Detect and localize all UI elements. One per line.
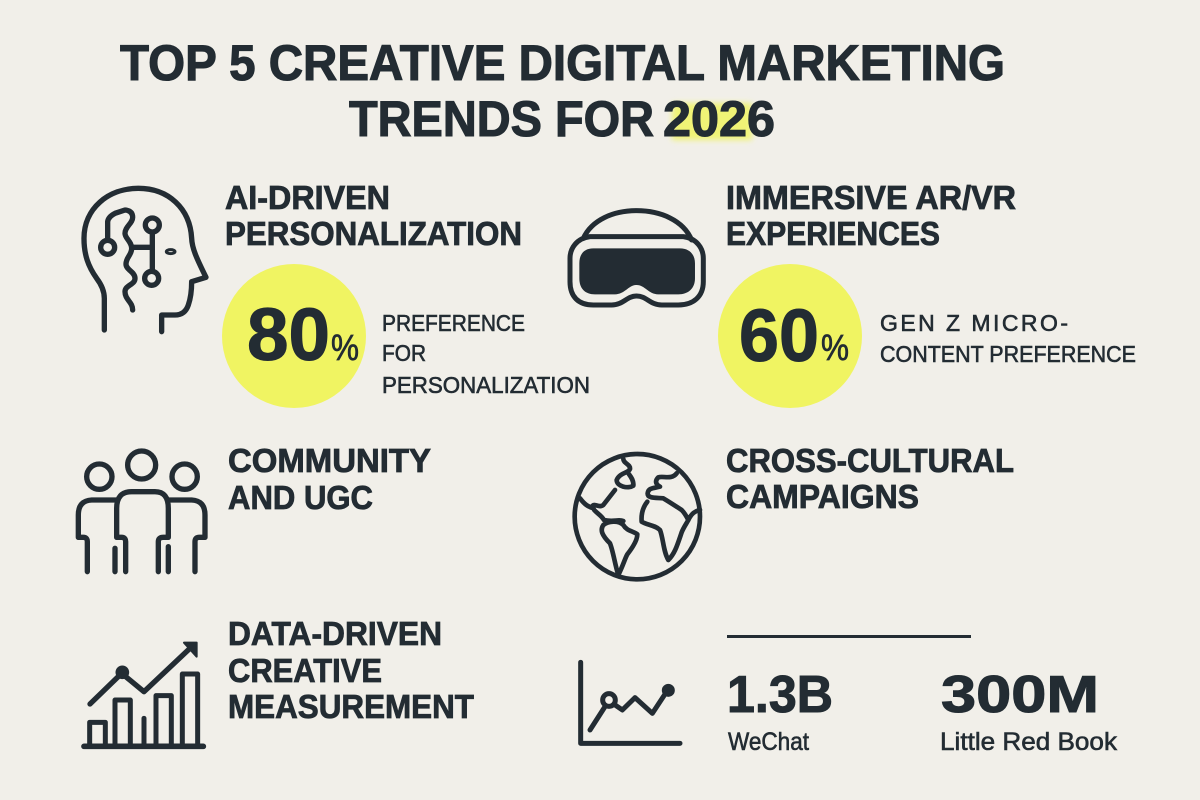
icon: three people bbox=[78, 451, 205, 572]
icon: VR headset bbox=[570, 211, 703, 305]
heading: EXPERIENCES bbox=[726, 215, 940, 252]
heading: COMMUNITY bbox=[228, 442, 431, 479]
stat circle: 80%: % bbox=[331, 327, 359, 368]
heading: PERSONALIZATION bbox=[225, 215, 522, 252]
stat label: GEN Z MICRO- bbox=[880, 310, 1068, 336]
stat label: PERSONALIZATION bbox=[382, 372, 590, 398]
heading: MEASUREMENT bbox=[228, 688, 474, 725]
stat circle: 60%: 60 bbox=[739, 294, 819, 377]
heading bbox=[726, 179, 1016, 252]
icon: head with circuit bbox=[84, 188, 206, 332]
stat: Little Red Book: 300M bbox=[941, 666, 1099, 724]
heading: CREATIVE bbox=[228, 652, 382, 689]
stat label bbox=[880, 310, 1136, 367]
panel: data-driven creative measurement bbox=[84, 615, 474, 746]
stat label bbox=[382, 310, 590, 398]
stat: WeChat bbox=[727, 666, 833, 756]
heading: CAMPAIGNS bbox=[726, 478, 919, 515]
panel: immersive AR/VR experiences bbox=[570, 179, 1136, 408]
panel: AI-driven personalization bbox=[84, 179, 590, 408]
stat label: CONTENT PREFERENCE bbox=[880, 341, 1136, 367]
title bbox=[120, 35, 1005, 147]
heading bbox=[726, 442, 1014, 515]
title: 2026 bbox=[663, 91, 775, 147]
stat: WeChat: WeChat bbox=[728, 728, 809, 756]
stat label: PREFERENCE bbox=[382, 310, 525, 336]
heading: DATA-DRIVEN bbox=[228, 615, 442, 652]
panel: platform statistics bbox=[581, 635, 1118, 756]
icon: bar chart with rising arrow bbox=[84, 643, 203, 746]
stat circle: 60% bbox=[718, 264, 862, 408]
icon: globe bbox=[575, 454, 700, 579]
title: TOP 5 CREATIVE DIGITAL MARKETING bbox=[120, 35, 1005, 91]
heading bbox=[228, 615, 474, 725]
stat circle: 60%: % bbox=[821, 327, 849, 368]
stat circle: 80% bbox=[222, 264, 366, 408]
heading: IMMERSIVE AR/VR bbox=[726, 179, 1016, 216]
heading: CROSS-CULTURAL bbox=[726, 442, 1014, 479]
panel: cross-cultural campaigns bbox=[575, 442, 1014, 579]
stat: Little Red Book bbox=[940, 666, 1118, 756]
title: TRENDS FOR bbox=[349, 91, 654, 147]
heading: AI-DRIVEN bbox=[225, 179, 390, 216]
icon: line chart bbox=[581, 662, 680, 743]
heading bbox=[225, 179, 522, 252]
stat circle: 80%: 80 bbox=[247, 293, 330, 376]
heading: AND UGC bbox=[228, 479, 373, 516]
panel: community and UGC bbox=[78, 442, 431, 572]
stat: Little Red Book: Little Red Book bbox=[940, 728, 1118, 756]
stat: WeChat: 1.3B bbox=[727, 666, 833, 724]
heading bbox=[228, 442, 431, 516]
divider line bbox=[727, 635, 971, 638]
stat label: FOR bbox=[382, 340, 426, 366]
